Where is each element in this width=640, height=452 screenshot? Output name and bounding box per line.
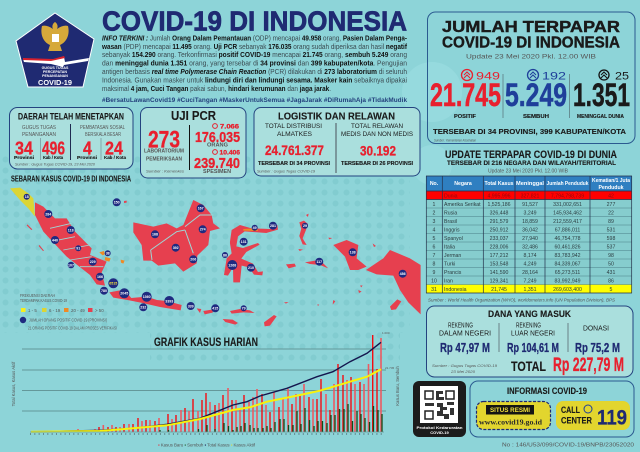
case markers: 1268: [228, 263, 236, 267]
heading: update dunia: [445, 149, 617, 174]
table row: dunia: 327,821: [521, 193, 539, 199]
case markers: 79: [242, 307, 246, 311]
panel: logistik dan relawan: LOGISTIK DAN RELAWAN: [278, 110, 395, 122]
case markers: 274: [200, 228, 206, 232]
panel: dana yang masuk: LUAR NEGERI: [511, 330, 555, 338]
case markers: 86: [223, 253, 227, 257]
table row 6: 537: [607, 244, 615, 250]
panel: logistik dan relawan: 30.192: [360, 142, 396, 158]
panel: dana yang masuk: REKENING: [448, 322, 473, 330]
stat: positif: POSITIF: [454, 114, 477, 120]
panel: uji pcr: 273: [148, 126, 180, 154]
panel: dana yang masuk: Rp 75,2 M: [575, 340, 620, 355]
panel: uji pcr: PEMERIKSAAN: [146, 156, 182, 162]
case markers: 206: [190, 258, 196, 262]
panel: dana yang masuk: DANA YANG MASUK: [488, 309, 571, 319]
panel: jumlah terpapar: COVID-19 DI INDONESIA: [442, 34, 620, 52]
case markers: 168: [152, 233, 158, 237]
stat: positif: [430, 70, 501, 120]
table row: dunia: 7,794,798,739: [551, 193, 584, 199]
panel: logistik dan relawan: ALMATKES: [277, 131, 313, 138]
region: kalimantan: [133, 200, 220, 272]
table row 2: 2: [433, 210, 436, 216]
table row: dunia: Dunia: [444, 193, 458, 199]
panel: logistik dan relawan: TERSEBAR DI 26 PROVINSI: [341, 161, 414, 167]
table row 4: [433, 227, 615, 233]
panel: uji pcr: [140, 108, 246, 178]
table row: indonesia: [431, 287, 613, 293]
chart: grafik kasus harian: 1.000: [382, 331, 390, 335]
badge: call center 119: CALL: [561, 405, 580, 416]
table row 5: 46,754,778: [555, 236, 581, 242]
table row 9: 431: [607, 270, 615, 276]
stat: meninggal dunia: 25: [615, 70, 629, 82]
panel: uji pcr: 10.406: [220, 150, 240, 156]
panel: jumlah terpapar: [428, 12, 635, 144]
table header: [430, 178, 630, 191]
panel: uji pcr: SPESIMEN: [203, 169, 231, 175]
region: maluku: [286, 214, 376, 268]
table row 1: 277: [607, 202, 615, 208]
panel: uji pcr: Sumber : Kemenkes: [146, 168, 184, 174]
table row 7: Jerman: [444, 253, 461, 259]
table row 7: 98: [608, 253, 614, 259]
table header: Jumlah Penduduk: [546, 181, 589, 187]
table row: indonesia: Indonesia: [444, 287, 467, 293]
panel: logistik dan relawan: TERSEBAR DI 34 PROVINSI: [258, 161, 331, 167]
table row 9: 9: [433, 270, 436, 276]
map legend: [20, 293, 117, 330]
case markers: 38: [106, 252, 110, 256]
table row 7: 177,212: [490, 253, 508, 259]
badge: call center 119: 119: [597, 406, 627, 430]
map heading: SEBARAN KASUS COVID-19 DI INDONESIA: [11, 174, 131, 184]
case markers: 1360: [143, 295, 151, 299]
intro text block: [101, 36, 408, 93]
case markers: 117: [316, 260, 322, 264]
chart: grafik kasus harian: [11, 331, 400, 448]
badge: situs resmi: www.covid19.go.id: [479, 418, 542, 426]
panel: logistik dan relawan: TOTAL DISTRIBUSI: [265, 123, 322, 130]
table row 3: 212,559,417: [553, 219, 582, 225]
intro text block: maksimal 4 jam, Cuci Tangan pakai sabun, hindari kerumunan dan jaga jarak.: [102, 86, 331, 93]
panel: daerah telah menetapkan: DAERAH TELAH MENETAPKAN: [18, 112, 124, 122]
region: java and nusa tenggara: [109, 290, 277, 326]
panel: uji pcr: UJI PCR: [171, 108, 217, 123]
panel: uji pcr: ORANG: [207, 142, 228, 148]
map legend: TERDAMPAK KASUS COVID-19: [20, 298, 67, 303]
case markers: 415: [212, 307, 218, 311]
table row 1: 331,002,651: [553, 202, 582, 208]
chart: grafik kasus harian: 21.745: [385, 366, 395, 370]
stat: positif: 949: [476, 70, 500, 82]
table row 2: 22: [608, 210, 614, 216]
case markers: 118: [68, 228, 74, 232]
region: papua: [366, 250, 421, 314]
case markers: 229: [90, 260, 96, 264]
badge: situs resmi: SITUS RESMI: [490, 408, 530, 414]
case markers: 131: [241, 240, 247, 244]
table row: indonesia: 21,745: [491, 287, 507, 293]
table header: Negara: [454, 181, 472, 187]
table row 9: 65,273,511: [555, 270, 580, 276]
logo: gugus tugas pentagon: PERCEPATAN: [43, 70, 67, 74]
heading: update dunia: TERSEBAR DI 216 NEGARA DAN WILAYAH/TERITORIAL: [447, 160, 616, 167]
panel: dana yang masuk: [426, 306, 633, 377]
indonesia map: [10, 188, 421, 326]
region: papua barat: [333, 240, 367, 270]
table row 7: 8,174: [524, 253, 537, 259]
case markers: 486: [400, 272, 406, 276]
table row 8: 8: [433, 261, 436, 267]
table row 3: 89: [608, 219, 614, 225]
hashtags: #BersatuLawanCovid19 #CuciTangan #MaskerUntukSemua #JagaJarak #DiRumahAja #TidakMudik: [102, 97, 407, 104]
chart: grafik kasus harian: Kasus Baru, Sembuh: [395, 366, 400, 406]
table row 7: 83,783,942: [555, 253, 581, 259]
panel: daerah telah menetapkan: BERSKALA BESAR: [85, 132, 121, 138]
table row 4: 531: [607, 227, 615, 233]
line: total kasus: [31, 342, 381, 432]
table row 2: 326,448: [490, 210, 508, 216]
panel: daerah telah menetapkan: Kab / Kota: [104, 155, 127, 160]
panel: dana yang masuk: DALAM NEGERI: [439, 330, 491, 338]
case markers: 339: [188, 304, 194, 308]
case markers: 780: [101, 289, 107, 293]
qr card: COVID-19: [430, 430, 449, 435]
panel: jumlah terpapar: TERSEBAR DI 34 PROVINSI, 399 KABUPATEN/KOTA: [433, 129, 626, 136]
map legend: 6 - 19: [49, 308, 61, 313]
case markers: 284: [45, 212, 51, 216]
panel: daerah telah menetapkan: Sumber : Gugus Tugas COVID-19, 23 Mei 2020: [15, 162, 96, 166]
qr card: Protokol Kedaruratan: [416, 425, 463, 430]
table source: Sumber : World Health Organization (WHO), worldometers.info (UN Population Division), BPS: [428, 298, 616, 302]
case markers: 107: [68, 263, 74, 267]
map legend: FREKUENSI DAERAH: [20, 293, 55, 298]
stat: positif: 21.745: [430, 77, 501, 113]
table row 10: Iran: [444, 278, 453, 284]
region: aceh: [10, 188, 35, 217]
qr card: [413, 381, 466, 437]
badge: situs resmi: [476, 402, 550, 430]
table row 8: [433, 261, 614, 267]
table row 3: 3: [433, 219, 436, 225]
panel: informasi covid-19: [470, 381, 634, 437]
panel: jumlah terpapar: JUMLAH TERPAPAR: [442, 19, 620, 36]
stat: sembuh: 192: [542, 70, 566, 82]
table row 6: [433, 244, 615, 250]
logo: gugus tugas pentagon: [16, 13, 94, 87]
panel: daerah telah menetapkan: Provinsi: [14, 155, 34, 160]
table row 9: [433, 270, 615, 276]
case markers: 18: [25, 195, 29, 199]
table row 1: 91,527: [522, 202, 538, 208]
panel: daerah telah menetapkan: GUGUS TUGAS: [22, 125, 56, 131]
table row 4: 4: [433, 227, 436, 233]
table row 10: 83,992,949: [555, 278, 581, 284]
case markers: 91: [76, 247, 80, 251]
table row 2: 145,934,462: [553, 210, 582, 216]
document number: No : 146/U53/099/COVID-19/BNPB/23052020: [502, 442, 634, 448]
intro text block: INFO TERKINI : Jumlah Orang Dalam Pemantauan (ODP) mencapai 49.958 orang, Pasien Dalam Penga-: [102, 36, 408, 42]
table row 2: 3,249: [524, 210, 537, 216]
bars: total: [78, 338, 381, 432]
panel: dana yang masuk: Sumber : Gugus Tugas COVID-19: [432, 363, 498, 368]
table header: Penduduk: [598, 185, 624, 191]
panel: dana yang masuk: Rp 47,97 M: [440, 340, 490, 355]
table row 7: 7: [433, 253, 436, 259]
table header: No.: [430, 181, 439, 187]
logo: gugus tugas pentagon: COVID-19: [38, 78, 72, 87]
table header: Meninggal: [516, 181, 545, 187]
table row 1: 1,525,186: [487, 202, 511, 208]
intro text block: Indonesia. Gunakan masker untuk lindungi diri dan lindungi sesama. Masker kain sebaiknya dipakai: [102, 77, 407, 84]
case markers: 2045: [120, 292, 128, 296]
panel: logistik dan relawan: TOTAL RELAWAN: [351, 123, 403, 130]
table row 5: 5: [433, 236, 436, 242]
badge: call center 119: CENTER: [561, 416, 592, 426]
case markers: 166: [97, 275, 103, 279]
table row: dunia: 42: [608, 193, 614, 199]
line: kasus aktif: [31, 369, 381, 432]
table row 6: 32,486: [522, 244, 538, 250]
panel: daerah telah menetapkan: [10, 108, 133, 169]
table row 6: 228,006: [490, 244, 508, 250]
region: sulawesi: [224, 225, 278, 282]
table row 4: 250,912: [490, 227, 508, 233]
panel: uji pcr: 239.740: [194, 155, 240, 172]
panel: daerah telah menetapkan: Kab / Kota: [43, 155, 64, 160]
panel: dana yang masuk: Rp 104,61 M: [507, 340, 559, 355]
panel: daerah telah menetapkan: 4: [83, 138, 92, 158]
panel: jumlah terpapar: Update 23 Mei 2020 Pkl. 12.00 WIB: [466, 54, 597, 60]
panel: daerah telah menetapkan: Provinsi: [77, 155, 97, 160]
panel: daerah telah menetapkan: PENANGANAN: [22, 132, 56, 138]
table row: dunia: 4,995,996: [487, 193, 511, 199]
map legend: 20 - 49: [71, 308, 85, 313]
region: sumatra: [35, 202, 107, 286]
map legend: 1 - 5: [28, 308, 37, 313]
table row 10: 7,249: [524, 278, 537, 284]
table: world cases: [426, 176, 632, 293]
table row 2: Rusia: [444, 210, 457, 216]
table row 1: Amerika Serikat: [444, 202, 481, 208]
case markers: 49: [253, 226, 257, 230]
region: small western islands: [27, 224, 44, 251]
table row 3: [433, 219, 614, 225]
bars: kasus baru: [83, 335, 377, 432]
logo: gugus tugas pentagon: GUGUS TUGAS: [42, 66, 69, 70]
badge: call center 119: [556, 401, 630, 430]
panel: jumlah terpapar: Sumber : Kementerian Kesehatan: [434, 138, 476, 142]
table row 4: Inggris: [444, 227, 460, 233]
case markers: [24, 194, 407, 312]
table row 8: 153,548: [490, 261, 508, 267]
case markers: 29: [303, 224, 307, 228]
table header: Kematian/1 Juta: [592, 178, 630, 184]
case markers: 281: [270, 224, 276, 228]
intro text block: dan meninggal dunia 1.351 orang, yang tersebar di 34 provinsi dan 399 kabupaten/kota. Pengujian: [102, 61, 407, 68]
table row 10: 129,341: [490, 278, 508, 284]
table row 8: 4,249: [524, 261, 537, 267]
logo: gugus tugas pentagon: PENANGANAN: [42, 74, 68, 78]
panel: dana yang masuk: REKENING: [516, 322, 541, 330]
table row 9: 141,590: [490, 270, 508, 276]
case markers: 150: [114, 201, 120, 205]
table row 6: 60,461,826: [555, 244, 581, 250]
table row 10: 86: [608, 278, 614, 284]
stat: sembuh: [505, 70, 567, 120]
table row: indonesia: 5: [610, 287, 613, 293]
table row 6: Italia: [444, 244, 455, 250]
table row 10: [431, 278, 614, 284]
chart legend: ▪ Kasus Baru ▪ Sembuh ▪ Total Kasus ▪ Kasus Aktif: [158, 442, 256, 448]
table row 5: 233,037: [490, 236, 508, 242]
panel: daerah telah menetapkan: 496: [42, 138, 65, 158]
table row 8: 50: [608, 261, 614, 267]
table row: indonesia: 31: [431, 287, 437, 293]
table row 3: Brasil: [444, 219, 457, 225]
panel: daerah telah menetapkan: 34: [15, 138, 33, 158]
table row 5: Spanyol: [444, 236, 463, 242]
table header: Total Kasus: [484, 181, 514, 187]
map legend: 21 ORANG POSITIF COVID-19 DALAM PROSES VERIFIKASI: [28, 326, 117, 330]
intro text block: antigen berbasis real time Polymerase Chain Reaction (PCR) dilakukan di 273 laboratorium di seluruh: [102, 69, 407, 76]
panel: dana yang masuk: TOTAL: [511, 358, 546, 374]
chart title: GRAFIK KASUS HARIAN: [154, 335, 258, 349]
panel: logistik dan relawan: Sumber : Gugus Tugas COVID-19: [257, 170, 316, 174]
intro text block: wasan (PDP) mencapai 11.495 orang. Uji PCR sebanyak 176.035 orang sudah diperiksa dan hasil negatif: [101, 44, 408, 51]
heading: update dunia: Update 23 Mei 2020 Pkl. 12.00 WIB: [488, 168, 568, 174]
title: COVID-19 DI INDONESIA: [102, 6, 407, 36]
stat: sembuh: 5.249: [505, 77, 567, 113]
table row 5: 598: [607, 236, 615, 242]
table row 3: 291,579: [490, 219, 508, 225]
table row 8: 84,339,067: [555, 261, 581, 267]
table row 3: 18,859: [522, 219, 538, 225]
panel: logistik dan relawan: MEDIS DAN NON MEDIS: [341, 131, 414, 138]
map legend: JUMLAH ORANG POSITIF COVID-19 (PROVINSI): [29, 318, 107, 322]
stat: meninggal dunia: [573, 70, 630, 120]
table row 1: [433, 202, 615, 208]
panel: uji pcr: 176.035: [195, 129, 240, 146]
table row 9: 28,164: [522, 270, 538, 276]
table row 10: 10: [431, 278, 437, 284]
panel: daerah telah menetapkan: PEMBATASAN SOSIAL: [80, 125, 125, 131]
table row 7: [433, 253, 614, 259]
case markers: 167: [198, 207, 204, 211]
case markers: 6515: [109, 282, 117, 286]
table row 1: 1: [433, 202, 436, 208]
stat: sembuh: SEMBUH: [523, 114, 549, 120]
panel: daerah telah menetapkan: 24: [105, 138, 123, 158]
case markers: 232: [140, 306, 146, 310]
case markers: 210: [248, 266, 254, 270]
case markers: 440: [52, 238, 58, 242]
panel: dana yang masuk: 23 Mei 2020: [450, 369, 476, 374]
table row: indonesia: 269,603,400: [553, 287, 582, 293]
panel: logistik dan relawan: [254, 108, 420, 176]
table row 6: 6: [433, 244, 436, 250]
panel: informasi covid-19: INFORMASI COVID-19: [507, 386, 587, 397]
stat: meninggal dunia: MENINGGAL DUNIA: [577, 114, 624, 120]
intro text block: sebanyak 154.290 orang. Terkonfirmasi positif COVID-19 mencapai 21.745 orang, sembuh 5.249 orang: [102, 52, 407, 59]
panel: logistik dan relawan: 24.761.377: [265, 142, 324, 158]
table row 9: Prancis: [444, 270, 462, 276]
table row 5: 27,940: [522, 236, 538, 242]
table row 2: [433, 210, 614, 216]
panel: dana yang masuk: DONASI: [583, 326, 609, 332]
case markers: 392: [173, 246, 179, 250]
case markers: 138: [350, 251, 356, 255]
table row: indonesia: 1,351: [524, 287, 537, 293]
region: bangka riau: [99, 251, 125, 264]
panel: uji pcr: LABORATORIUM: [144, 148, 184, 154]
bars: sembuh: [160, 404, 382, 432]
table row: dunia: [444, 193, 614, 199]
panel: uji pcr: 7.066: [220, 124, 239, 130]
table row 4: 67,886,011: [555, 227, 580, 233]
table row 5: [433, 236, 615, 242]
case markers: 3393: [165, 299, 173, 303]
table row 4: 36,042: [522, 227, 538, 233]
table row 8: Turki: [444, 261, 455, 267]
chart: grafik kasus harian: Total Kasus, Kasus Aktif: [11, 361, 16, 406]
map legend: > 50: [95, 308, 104, 313]
